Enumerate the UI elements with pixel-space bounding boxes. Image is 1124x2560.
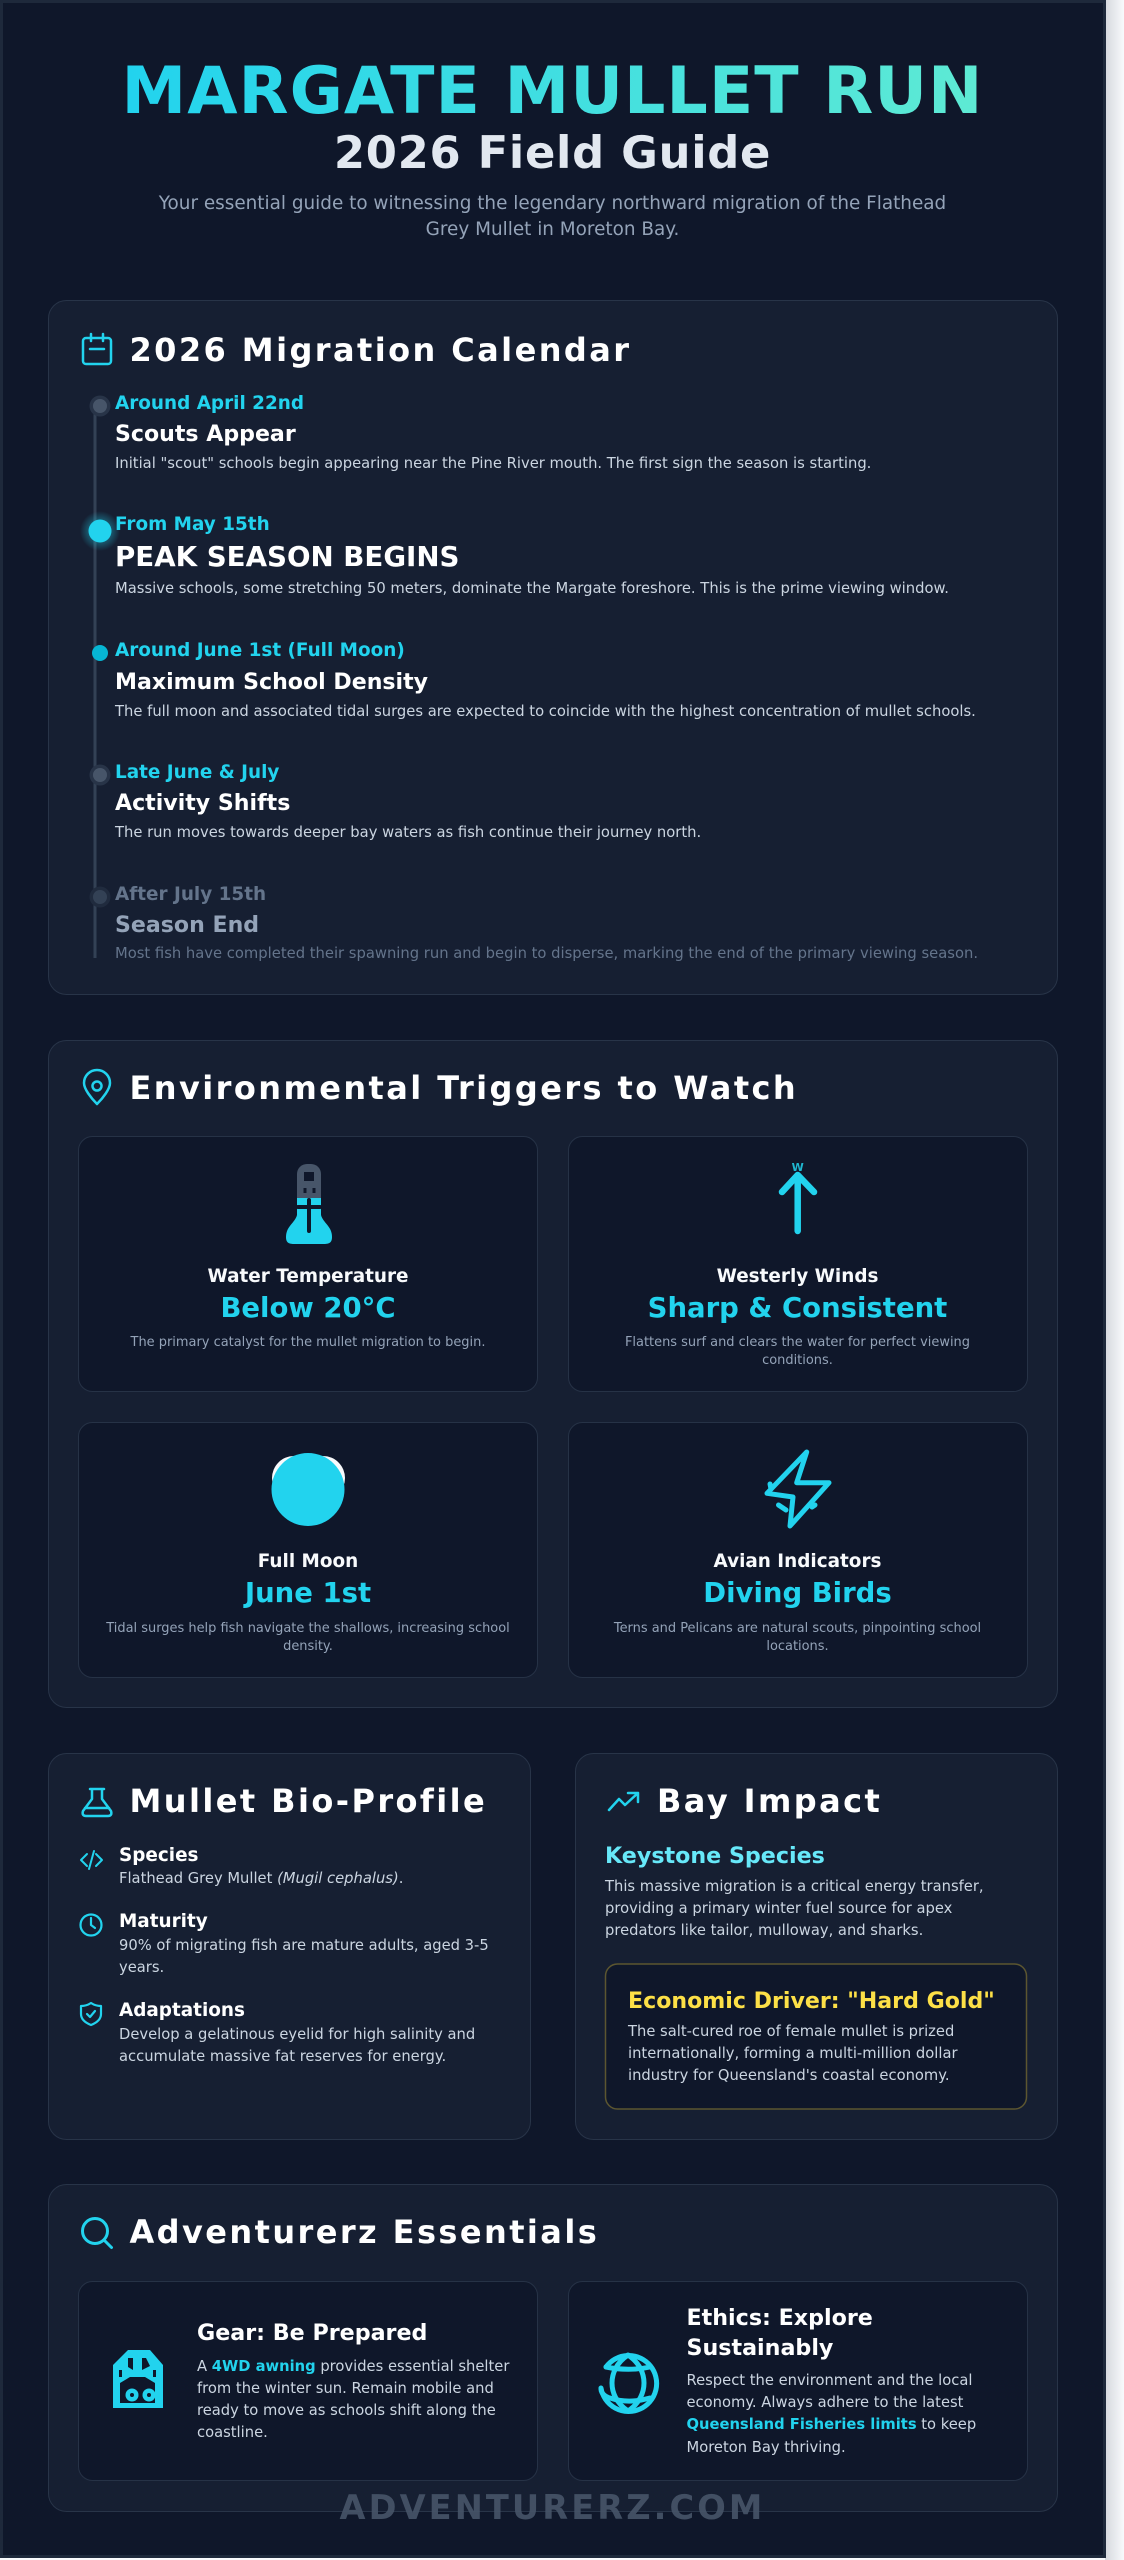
event: season end xyxy=(90,884,978,962)
item: maturity: years. xyxy=(119,1959,164,1976)
event: maximum density xyxy=(92,640,976,720)
icon: globe xyxy=(601,2355,657,2411)
event: maximum density: The full moon and associated tidal surges are expected to coincide with the highest concentration of mullet schools. xyxy=(114,703,976,720)
card: avian indicators: Diving Birds xyxy=(703,1577,892,1609)
card: westerly winds: Westerly Winds xyxy=(717,1266,878,1287)
page edge xyxy=(1105,0,1124,2560)
event: scouts appear: Around April 22nd xyxy=(115,393,304,414)
card: gear: ready to move as schools shift along the xyxy=(197,2402,496,2419)
card: avian indicators: Avian Indicators xyxy=(714,1551,882,1572)
icon: flask xyxy=(83,1789,111,1816)
card: gear: 4WD awning provides essential shelter xyxy=(212,2358,509,2375)
card: water temperature xyxy=(78,1136,538,1392)
item: adaptations: Adaptations xyxy=(119,2000,245,2021)
card: gear: Gear: Be Prepared xyxy=(197,2320,427,2346)
panel: bay impact xyxy=(576,1754,1058,2140)
card: ethics: Sustainably xyxy=(686,2335,834,2361)
card: avian indicators xyxy=(568,1422,1028,1678)
callout: economic driver: The salt-cured roe of female mullet is prized xyxy=(627,2023,954,2040)
event: scouts appear xyxy=(90,393,871,472)
heading: bio-profile: Mullet Bio-Profile xyxy=(130,1782,487,1820)
keystone species: Keystone Species xyxy=(605,1843,825,1869)
intro text: Grey Mullet in Moreton Bay. xyxy=(426,219,679,240)
card: gear: coastline. xyxy=(197,2424,268,2441)
card: water temperature: Water Temperature xyxy=(207,1266,409,1287)
event: activity shifts: The run moves towards deeper bay waters as fish continue their journey north. xyxy=(114,824,701,841)
event: season end: After July 15th xyxy=(115,884,266,905)
icon: trending up xyxy=(609,1793,638,1810)
event: peak season: Massive schools, some stretching 50 meters, dominate the Margate foreshore. This is the prime viewing window. xyxy=(115,580,949,597)
icon: vehicle awning xyxy=(113,2350,163,2408)
card: ethics: economy. Always adhere to the latest xyxy=(686,2394,964,2411)
panel: essentials xyxy=(48,2184,1058,2512)
keystone species: This massive migration is a critical energy transfer, xyxy=(604,1878,984,1895)
icon: moon xyxy=(272,1453,345,1526)
card: full moon xyxy=(78,1422,538,1678)
card: ethics: Moreton Bay thriving. xyxy=(686,2439,846,2456)
callout: economic driver: industry for Queensland's coastal economy. xyxy=(628,2067,950,2084)
item: adaptations: Develop a gelatinous eyelid for high salinity and xyxy=(119,2026,475,2043)
heading: triggers: Environmental Triggers to Watch xyxy=(130,1069,798,1107)
card: gear: from the winter sun. Remain mobile and xyxy=(197,2380,494,2397)
card: full moon: density. xyxy=(283,1639,333,1654)
icon: wind arrow xyxy=(782,1161,814,1231)
card: full moon: Tidal surges help fish navigate the shallows, increasing school xyxy=(105,1621,510,1636)
item: maturity xyxy=(80,1911,489,1976)
item: maturity: Maturity xyxy=(119,1911,208,1932)
callout: economic driver: internationally, forming a multi-million dollar xyxy=(628,2045,958,2062)
keystone species: providing a primary winter fuel source for apex xyxy=(605,1900,953,1917)
heading: bay impact: Bay Impact xyxy=(657,1782,882,1820)
item: adaptations xyxy=(81,2000,475,2065)
event: activity shifts: Late June & July xyxy=(115,762,279,783)
card: westerly winds: Flattens surf and clears the water for perfect viewing xyxy=(625,1335,970,1350)
event: season end: Season End xyxy=(115,913,259,938)
card: westerly winds: Sharp & Consistent xyxy=(648,1292,947,1324)
event: scouts appear: Initial "scout" schools begin appearing near the Pine River mouth. The first sign the season is starting. xyxy=(115,455,871,472)
card: ethics: Queensland Fisheries limits xyxy=(686,2416,917,2433)
timeline line xyxy=(94,400,96,958)
card: water temperature: Below 20°C xyxy=(220,1292,396,1324)
keystone species: predators like tailor, mulloway, and sharks. xyxy=(605,1922,923,1939)
event: activity shifts xyxy=(90,762,701,841)
item: species xyxy=(81,1845,403,1887)
icon: bolt xyxy=(767,1452,829,1526)
panel: environmental triggers xyxy=(48,1040,1058,1708)
icon: thermometer xyxy=(286,1164,332,1244)
card: gear xyxy=(78,2282,538,2480)
card: ethics xyxy=(568,2282,1028,2480)
callout: economic driver xyxy=(606,1964,1026,2109)
item: adaptations: accumulate massive fat reserves for energy. xyxy=(119,2048,446,2065)
event: season end: Most fish have completed their spawning run and begin to disperse, marking the end of the primary viewing season. xyxy=(115,945,978,962)
heading: calendar: 2026 Migration Calendar xyxy=(130,331,631,369)
event: peak season: From May 15th xyxy=(115,514,270,535)
intro text: Your essential guide to witnessing the legendary northward migration of the Flathead xyxy=(158,193,946,214)
event: activity shifts: Activity Shifts xyxy=(115,791,290,816)
card: avian indicators: locations. xyxy=(766,1639,829,1654)
card: ethics: Respect the environment and the local xyxy=(686,2372,972,2389)
event: maximum density: Maximum School Density xyxy=(115,670,428,695)
icon: wind arrow: W xyxy=(792,1161,804,1174)
event: peak season xyxy=(80,511,949,597)
item: maturity: 90% of migrating fish are mature adults, aged 3-5 xyxy=(119,1937,489,1954)
panel: migration calendar xyxy=(48,300,1058,994)
event: peak season: PEAK SEASON BEGINS xyxy=(115,540,459,573)
card: avian indicators: Terns and Pelicans are natural scouts, pinpointing school xyxy=(613,1621,981,1636)
keystone species xyxy=(604,1843,984,1939)
event: maximum density: Around June 1st (Full Moon) xyxy=(115,640,405,661)
item: species: Species xyxy=(119,1845,199,1866)
card: full moon: Full Moon xyxy=(258,1551,358,1572)
card: westerly winds xyxy=(568,1136,1028,1392)
item: species: Flathead Grey Mullet (Mugil cephalus). xyxy=(119,1870,403,1887)
card: westerly winds: conditions. xyxy=(762,1353,833,1368)
subtitle: 2026 Field Guide xyxy=(334,126,771,179)
icon: map pin xyxy=(84,1070,110,1104)
card: ethics: to keep xyxy=(917,2416,976,2433)
card: ethics: Ethics: Explore xyxy=(686,2305,873,2331)
event: scouts appear: Scouts Appear xyxy=(115,422,296,447)
callout: economic driver: Economic Driver: "Hard Gold" xyxy=(628,1988,995,2014)
icon: search xyxy=(82,2218,112,2248)
card: full moon: June 1st xyxy=(243,1577,371,1609)
title: MARGATE MULLET RUN xyxy=(122,54,983,129)
header xyxy=(122,54,983,240)
watermark: ADVENTURERZ.COM xyxy=(340,2488,765,2527)
card: gear: A xyxy=(197,2358,212,2375)
panel: bio-profile xyxy=(48,1754,530,2140)
icon: calendar xyxy=(83,334,111,364)
card: water temperature: The primary catalyst for the mullet migration to begin. xyxy=(130,1335,485,1350)
heading: essentials: Adventurerz Essentials xyxy=(130,2213,599,2251)
